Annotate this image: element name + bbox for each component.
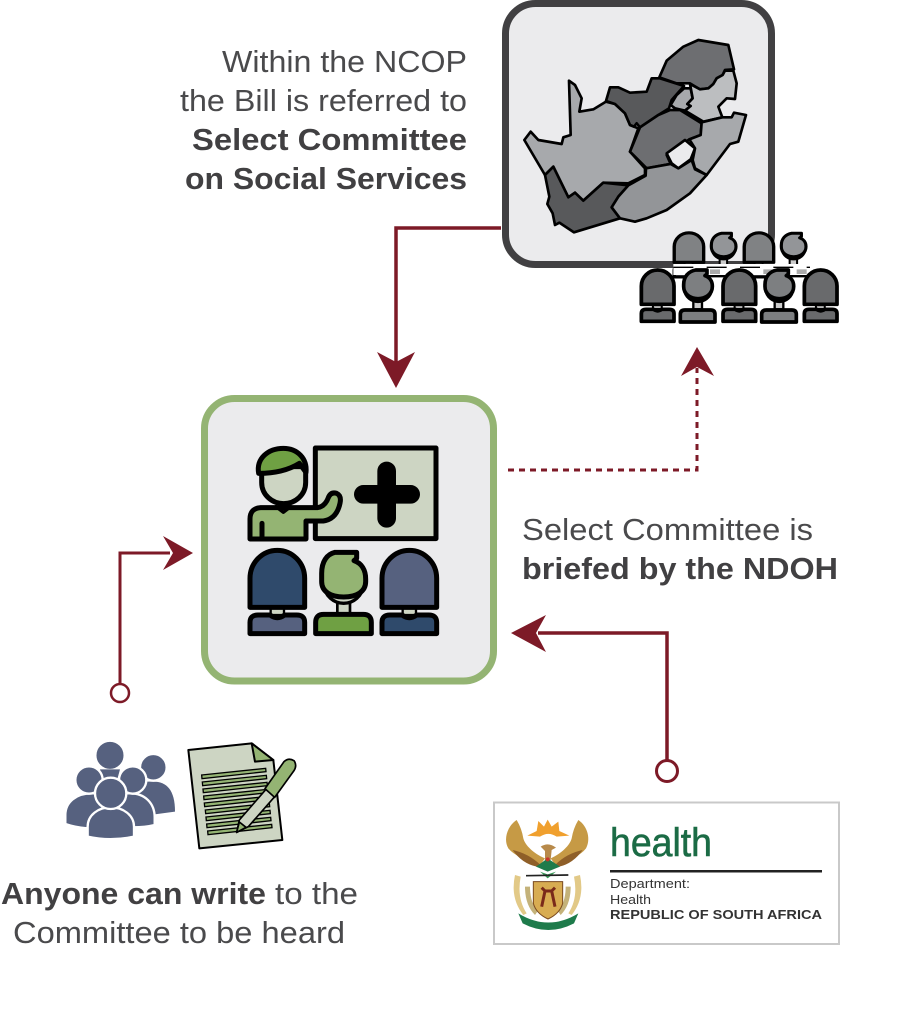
panel: committee briefing	[204, 398, 494, 681]
logo: Department of Health	[494, 802, 839, 944]
teacher	[250, 493, 340, 539]
text lines	[202, 768, 272, 835]
logo: Department of Health: REPUBLIC OF SOUTH AFRICA	[610, 907, 823, 922]
student middle	[337, 602, 350, 614]
arrow: map panel to committee	[377, 228, 501, 388]
wordmark: health	[610, 821, 712, 865]
arrow: dashed committee to NCOP	[508, 347, 714, 470]
text: anyone can write: Anyone can write	[1, 876, 266, 911]
student left	[271, 606, 284, 615]
logo: Department of Health: Department:	[610, 876, 690, 891]
text: briefed by NDOH	[522, 512, 838, 586]
text: anyone can write: to the	[275, 876, 358, 911]
text: within the NCOP: on Social Services	[185, 161, 467, 196]
front row figures	[641, 270, 837, 322]
text: within the NCOP: Within the NCOP	[222, 44, 467, 79]
back row figures	[674, 233, 808, 277]
icon: committee audience	[641, 233, 837, 322]
icon: group of people	[65, 741, 175, 839]
arrow: NDOH to committee	[511, 615, 678, 782]
text: anyone can write	[1, 876, 358, 950]
text: within the NCOP: the Bill is referred to	[180, 83, 467, 118]
text: within the NCOP: Select Committee	[192, 122, 467, 157]
pen	[237, 759, 296, 832]
panel: South Africa map	[506, 4, 772, 264]
emblem: coat of arms	[506, 820, 588, 930]
text: briefed by NDOH: briefed by the NDOH	[522, 551, 838, 586]
arrow: public submissions to committee	[111, 536, 193, 702]
map: provinces	[524, 40, 746, 232]
plus sign	[363, 471, 411, 518]
icon: document and pen	[188, 743, 296, 848]
text: briefed by NDOH: Select Committee is	[522, 512, 813, 547]
student right	[403, 606, 416, 615]
text: anyone can write: Committee to be heard	[13, 915, 345, 950]
logo: Department of Health: Health	[610, 892, 651, 907]
band between rows	[673, 264, 810, 275]
board	[315, 448, 436, 539]
icon: teacher and audience	[250, 448, 437, 634]
text: within the NCOP	[180, 44, 467, 196]
